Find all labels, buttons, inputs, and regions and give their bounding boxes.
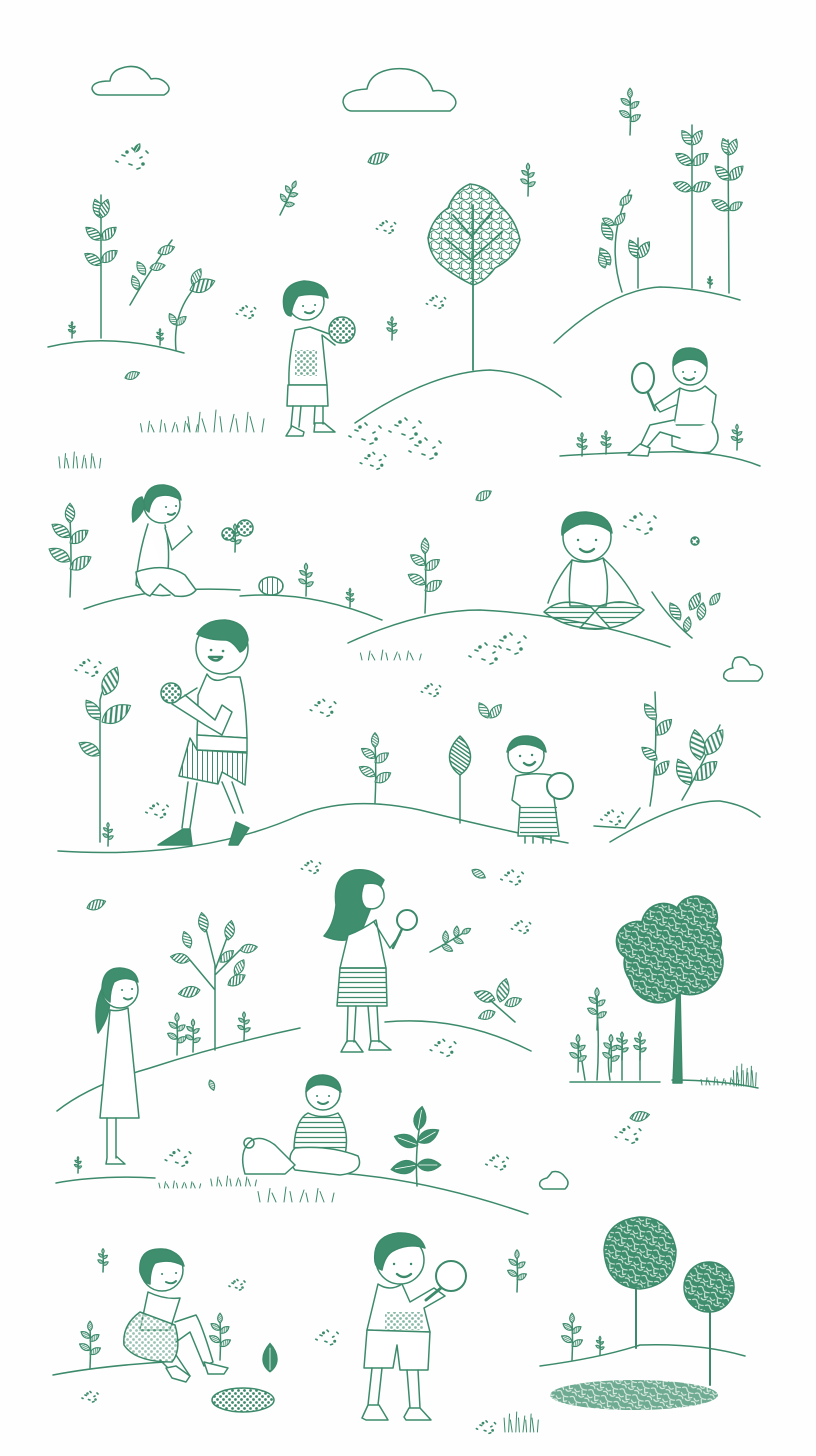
arms <box>172 688 232 735</box>
child: girl seated row 6 <box>124 1249 228 1382</box>
face <box>166 506 176 515</box>
small sprouts row 1 <box>68 88 642 345</box>
leafy sprout <box>390 1105 442 1186</box>
legs <box>136 568 196 596</box>
scattered bits top <box>116 142 446 469</box>
child: boy seated with striped sweater <box>243 1075 360 1175</box>
cloud small bottom <box>540 1172 568 1189</box>
foot <box>628 444 650 456</box>
hair <box>507 736 546 752</box>
round tree small <box>684 1262 734 1385</box>
cloud right <box>724 657 763 681</box>
face <box>209 650 223 660</box>
legs <box>362 1368 431 1420</box>
head <box>508 737 544 773</box>
shirt texture <box>385 1312 423 1330</box>
flowers <box>243 1138 295 1174</box>
plants right row 3 <box>594 692 729 828</box>
body <box>569 558 607 606</box>
face <box>317 1096 329 1104</box>
sweater <box>294 1113 346 1155</box>
face <box>394 1264 411 1277</box>
magnifier <box>397 910 417 930</box>
plant right row 2 <box>652 590 723 638</box>
legs <box>106 1118 125 1164</box>
face <box>520 755 535 765</box>
leafy shrub row 4 <box>166 912 258 1055</box>
foot <box>166 1362 228 1382</box>
hair <box>306 1075 341 1092</box>
waistband <box>197 735 247 752</box>
plant tall left row 3 <box>75 659 135 846</box>
face <box>162 1273 176 1283</box>
grass and plants by large tree <box>568 988 756 1086</box>
handle <box>426 1288 441 1300</box>
shirt texture <box>295 350 317 376</box>
shoes <box>158 822 249 845</box>
cloud top centre <box>343 69 456 111</box>
legs <box>160 1315 213 1376</box>
row 2 small plants <box>222 488 699 664</box>
child: boy with magnifier row 6 <box>362 1233 466 1420</box>
hair <box>375 1233 425 1270</box>
hair <box>140 1249 184 1284</box>
plant left row 2 <box>46 503 94 597</box>
pony <box>132 497 145 522</box>
tall plants upper right <box>672 125 746 293</box>
mirror <box>547 773 573 799</box>
grass row 5 <box>74 1079 650 1202</box>
plant tall left row 1 <box>82 195 120 338</box>
body <box>140 1292 180 1330</box>
legs <box>341 1006 391 1052</box>
plant curved row 1 <box>167 267 217 350</box>
hills <box>48 287 760 1375</box>
legs <box>290 1147 360 1175</box>
hair <box>673 348 707 367</box>
striped skirt <box>337 968 387 1006</box>
shrubs on upper right hill <box>596 190 713 292</box>
hair <box>102 968 138 1002</box>
shorts <box>179 738 247 785</box>
pony <box>96 985 110 1033</box>
legs <box>286 406 335 436</box>
shorts <box>287 385 328 406</box>
body <box>289 327 335 385</box>
head <box>563 513 611 561</box>
arms <box>548 558 638 604</box>
row 6 right plants <box>476 1250 605 1433</box>
hair <box>144 485 181 512</box>
ground leaf patch <box>550 1380 718 1410</box>
plant leaning row 1 <box>129 240 176 305</box>
arm <box>165 526 192 550</box>
dress <box>100 1008 139 1118</box>
child: long-haired girl with magnifier <box>324 870 417 1052</box>
hair <box>562 512 612 535</box>
body <box>340 920 400 968</box>
face <box>578 540 596 552</box>
child: big boy walking <box>158 620 249 845</box>
shorts <box>364 1330 430 1370</box>
leaf mound <box>212 1388 274 1412</box>
row 6 plants <box>78 1249 338 1402</box>
sprouts near seated boy <box>576 424 744 456</box>
striped legs <box>544 602 644 629</box>
hair <box>283 281 328 316</box>
hair <box>197 620 248 652</box>
shrub near hill <box>473 977 523 1022</box>
child: boy seated cross-legged <box>544 512 644 629</box>
hip <box>124 1312 178 1362</box>
large patterned tree <box>617 896 723 1083</box>
head <box>376 1236 424 1284</box>
child: boy with ball <box>283 281 355 436</box>
head <box>102 972 138 1008</box>
long hair <box>324 870 384 940</box>
magnifier <box>632 363 654 393</box>
head <box>673 351 707 385</box>
round tree large <box>604 1217 676 1348</box>
head <box>288 284 324 320</box>
head <box>196 622 248 674</box>
face <box>683 372 695 380</box>
grass patches row 1 <box>59 410 264 468</box>
face <box>303 305 315 313</box>
legs <box>640 420 718 453</box>
body <box>512 774 559 836</box>
body <box>136 524 170 596</box>
handle <box>648 393 655 410</box>
child: boy seated with magnifier <box>628 348 718 456</box>
face <box>361 883 384 909</box>
head <box>141 1249 183 1291</box>
body <box>655 386 716 425</box>
row 3 plants and bits <box>146 684 505 823</box>
head <box>306 1076 340 1110</box>
legs <box>182 782 243 828</box>
child: girl with mirror <box>507 736 573 843</box>
cloud top left <box>92 66 169 95</box>
magnifier <box>436 1261 466 1291</box>
handle <box>393 929 402 948</box>
legs <box>525 836 551 843</box>
skirt stripes <box>520 806 557 834</box>
child: standing girl in dress <box>96 968 139 1164</box>
head <box>144 487 180 523</box>
leafy tree row 1 <box>428 184 520 370</box>
shirt <box>367 1284 445 1332</box>
ball <box>161 683 181 703</box>
shirt <box>197 674 247 738</box>
face <box>122 989 132 1000</box>
child: girl seated with ponytail <box>132 485 196 596</box>
row 4 bits <box>85 861 531 1056</box>
ball <box>329 317 355 343</box>
flower spots <box>244 1138 254 1148</box>
